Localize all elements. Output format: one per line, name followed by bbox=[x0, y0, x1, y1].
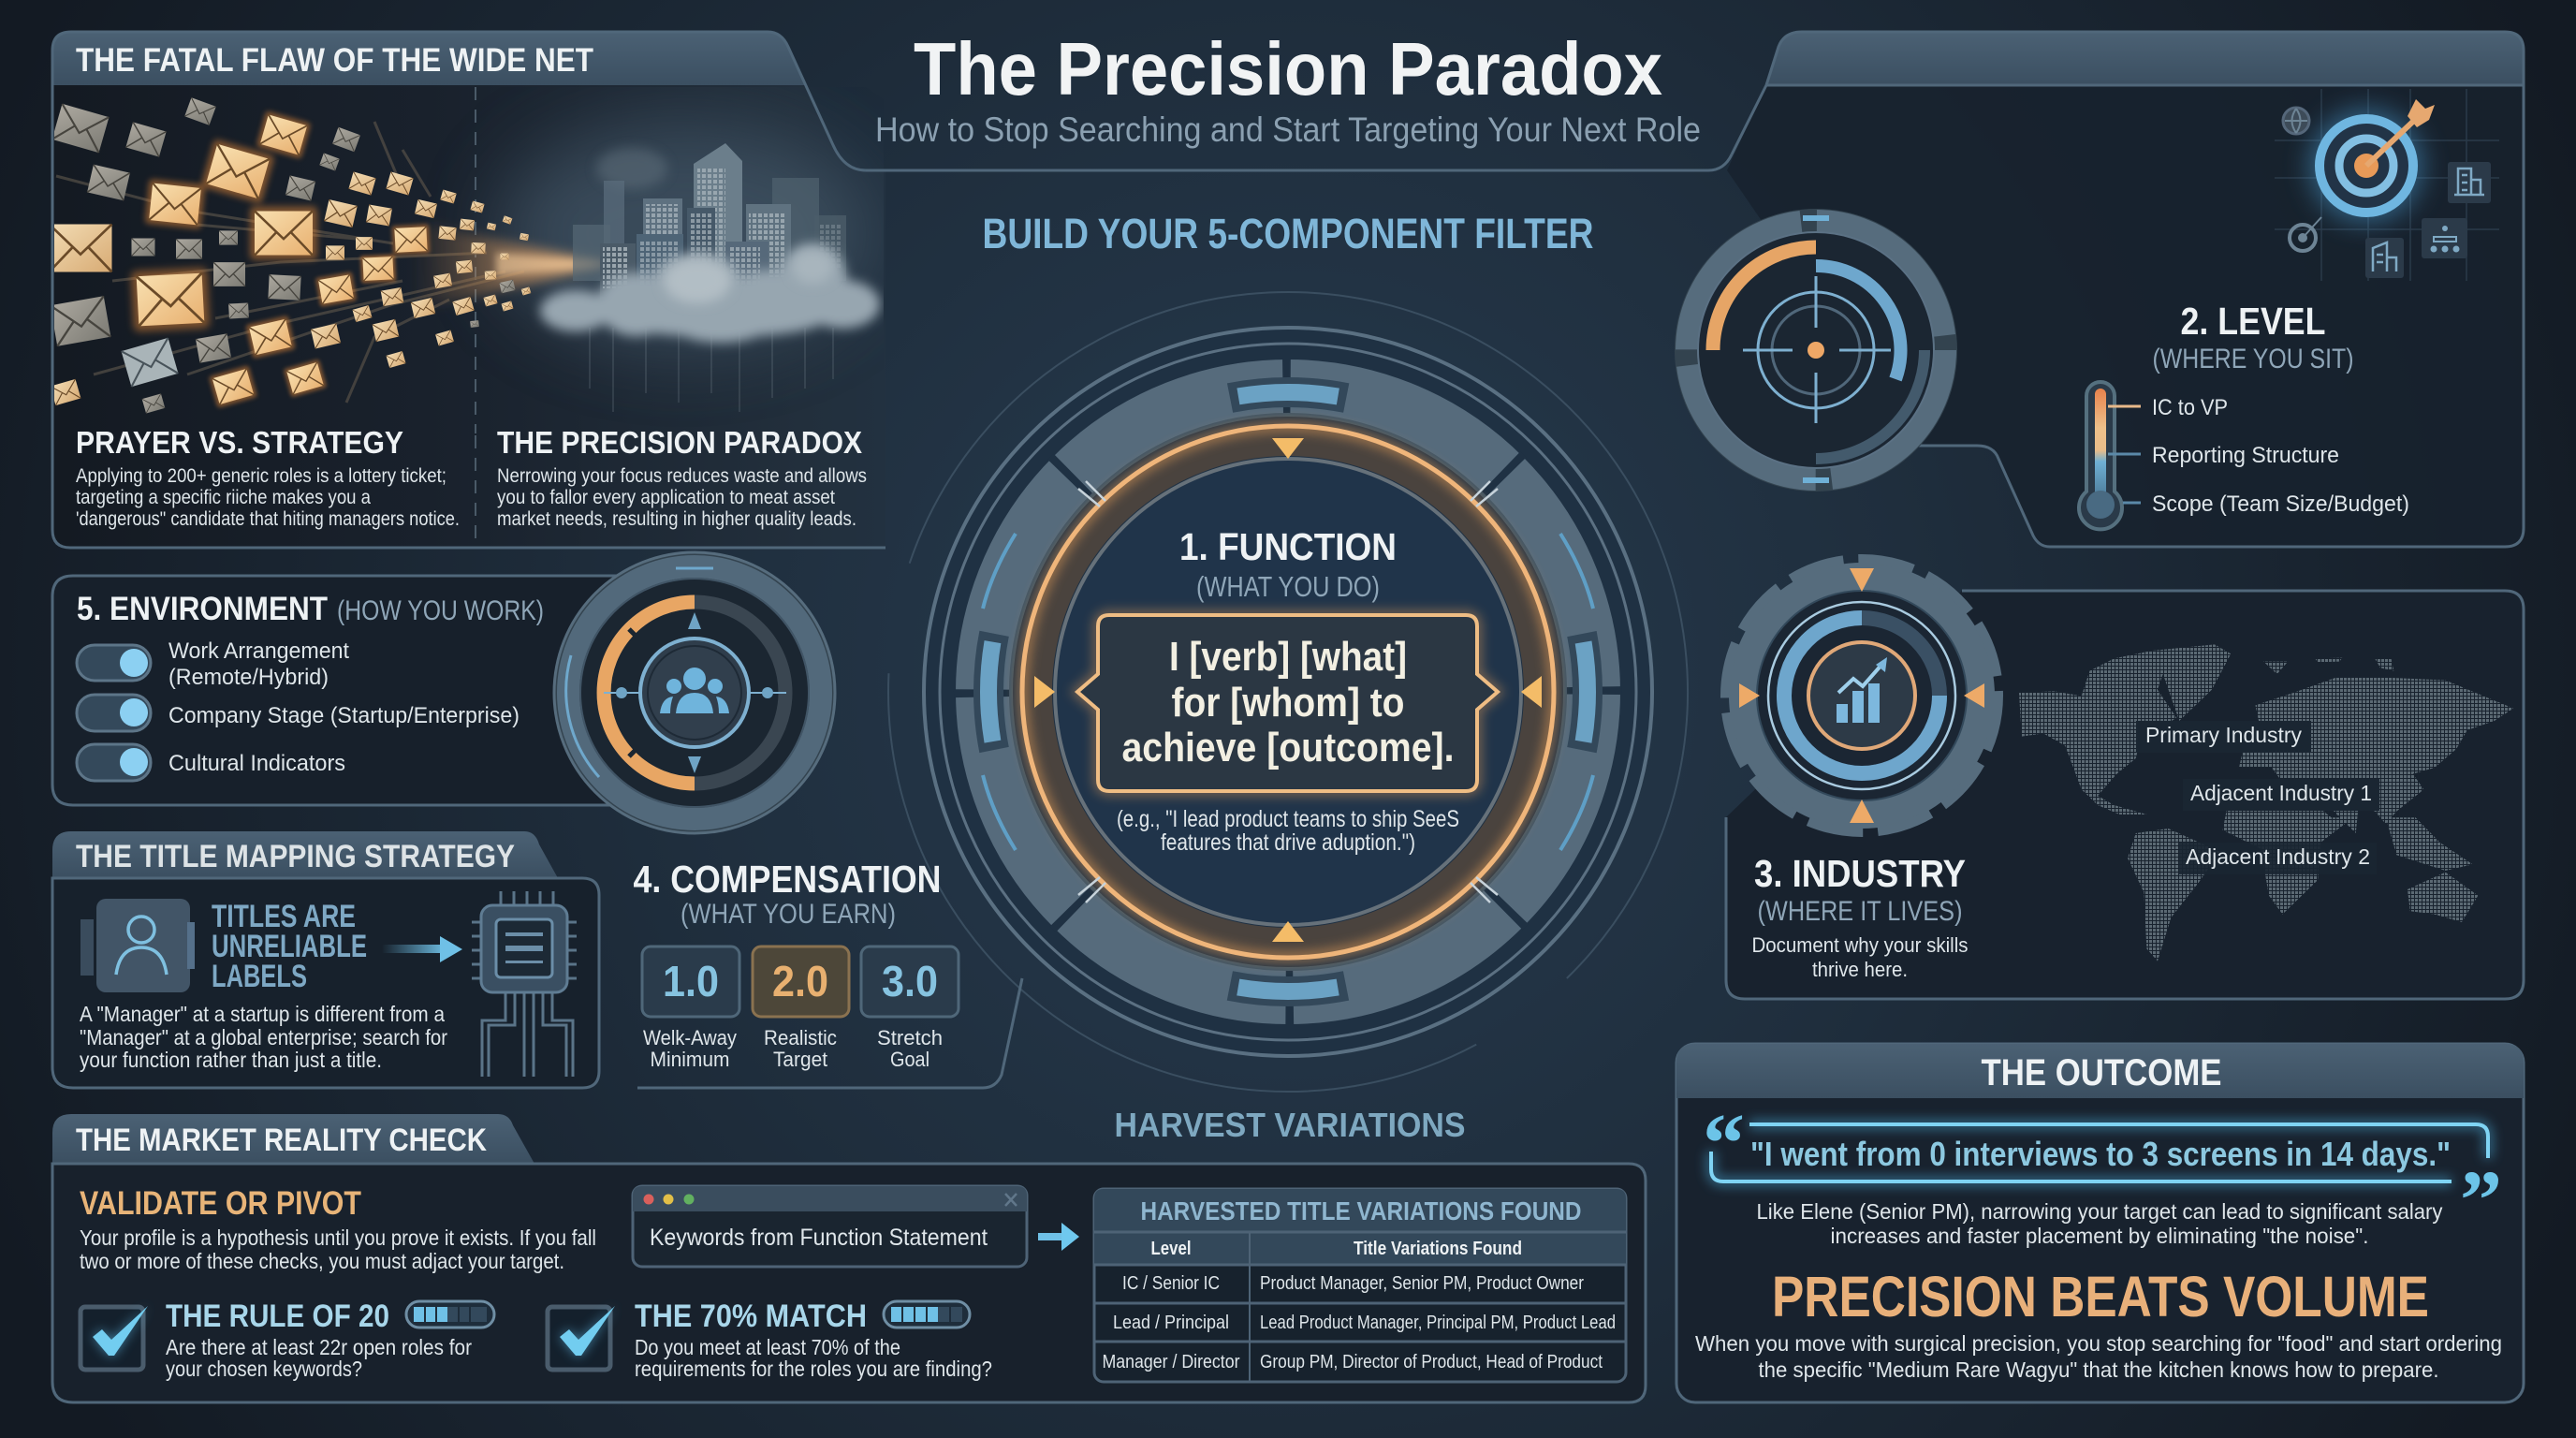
example sentence: (e.g., "I lead product teams to ship SeeS bbox=[1117, 806, 1459, 832]
check: the rule of 20: THE RULE OF 20 bbox=[166, 1299, 389, 1334]
panel: the market reality check bbox=[52, 1114, 1646, 1402]
text block: surgical precision bbox=[1695, 1331, 2502, 1382]
arrow: title to function bbox=[382, 936, 462, 962]
text block: like elene: increases and faster placement by eliminating "the noise". bbox=[1831, 1224, 2368, 1248]
panel: the fatal flaw of the wide net bbox=[49, 32, 886, 548]
panel: 2. level bbox=[1675, 32, 2524, 547]
card: realistic target: Realistic bbox=[764, 1026, 837, 1049]
heading: 2. level: 2. LEVEL bbox=[2181, 300, 2325, 343]
check: the 70% match: requirements for the roles you are finding? bbox=[635, 1357, 992, 1381]
toggle: work arrangement: (Remote/Hybrid) bbox=[168, 665, 329, 690]
header: the outcome: THE OUTCOME bbox=[1981, 1052, 2222, 1093]
map label: adjacent industry 2: Adjacent Industry 2 bbox=[2186, 844, 2370, 869]
card: realistic target: Target bbox=[773, 1048, 827, 1071]
callout: titles are unreliable labels bbox=[212, 899, 367, 994]
table: harvested title variations bbox=[1094, 1189, 1626, 1382]
text block: the precision paradox bbox=[497, 425, 867, 530]
storm cloud bbox=[540, 243, 880, 412]
icon: chip with traces bbox=[472, 891, 577, 1077]
panel: the title mapping strategy bbox=[52, 831, 599, 1088]
text block: prayer vs. strategy: 'dangerous" candidate that hiting managers notice. bbox=[76, 508, 460, 530]
text block: the precision paradox: you to fallor every application to meat asset bbox=[497, 487, 835, 508]
level list: Reporting Structure bbox=[2152, 443, 2339, 468]
text block: like elene: Like Elene (Senior PM), narrowing your target can lead to significant salary bbox=[1756, 1199, 2443, 1224]
testimonial quote: ” bbox=[2460, 1154, 2502, 1247]
illustration: envelopes streaming to a clouded city bbox=[49, 87, 880, 435]
header: title mapping: THE TITLE MAPPING STRATEGY bbox=[76, 839, 515, 874]
level list bbox=[2152, 395, 2409, 517]
section: 4. compensation bbox=[633, 858, 1022, 1088]
icon cluster: target and arrow bbox=[2275, 89, 2499, 281]
table: harvested title variations: IC / Senior IC bbox=[1122, 1273, 1220, 1294]
subtitle: How to Stop Searching and Start Targeting Your Next Role bbox=[875, 110, 1701, 149]
text block: validate or pivot: two or more of these checks, you must adjact your target. bbox=[80, 1249, 564, 1273]
text block: prayer vs. strategy bbox=[76, 425, 460, 530]
check: the rule of 20 bbox=[80, 1299, 494, 1381]
thermometer icon bbox=[2079, 382, 2141, 529]
subheading: where it lives: (WHERE IT LIVES) bbox=[1758, 896, 1962, 927]
header: fatal flaw: THE FATAL FLAW OF THE WIDE NET bbox=[76, 42, 593, 79]
toggle: work arrangement bbox=[77, 638, 349, 690]
card: stretch goal: Goal bbox=[890, 1048, 929, 1071]
table: harvested title variations: Title Variations Found bbox=[1354, 1239, 1522, 1259]
card: stretch goal bbox=[861, 946, 959, 1071]
heading: 4. compensation: 4. COMPENSATION bbox=[633, 858, 942, 901]
city skyline bbox=[573, 143, 846, 300]
icon: person card bbox=[80, 899, 195, 992]
card: stretch goal: 3.0 bbox=[882, 957, 938, 1005]
card: realistic target bbox=[753, 946, 849, 1071]
formula box: I [verb] [what] bbox=[1169, 634, 1407, 680]
text block: document why: Document why your skills bbox=[1752, 933, 1968, 957]
section heading: harvest variations: HARVEST VARIATIONS bbox=[1114, 1106, 1466, 1144]
card: realistic target: 2.0 bbox=[772, 957, 828, 1005]
text block: the precision paradox: market needs, resulting in higher quality leads. bbox=[497, 508, 856, 530]
card: walk-away minimum: Welk-Away bbox=[643, 1026, 737, 1049]
subheading: how you work: (HOW YOU WORK) bbox=[337, 595, 544, 626]
table: harvested title variations: Lead / Principal bbox=[1113, 1313, 1229, 1333]
panel: the outcome bbox=[1676, 1044, 2524, 1402]
map label: adjacent industry 1: Adjacent Industry 1 bbox=[2190, 781, 2372, 805]
browser window: keywords bbox=[633, 1186, 1027, 1267]
text block: validate or pivot: Your profile is a hypothesis until you prove it exists. If you fall bbox=[80, 1225, 596, 1250]
heading: 5. environment: 5. ENVIRONMENT bbox=[77, 591, 328, 627]
check: the 70% match: Do you meet at least 70% of the bbox=[635, 1335, 900, 1359]
icon: growth chart bbox=[1837, 657, 1887, 723]
testimonial quote: “ bbox=[1703, 1097, 1745, 1190]
testimonial quote bbox=[1703, 1097, 2502, 1247]
icon: people bbox=[660, 668, 729, 713]
text block: manager comparison: A "Manager" at a startup is different from a bbox=[80, 1002, 445, 1026]
level gauge bbox=[1675, 209, 1957, 492]
subheading: what you do: (WHAT YOU DO) bbox=[1196, 570, 1380, 603]
table: harvested title variations: Manager / Director bbox=[1103, 1352, 1240, 1372]
check: the 70% match: THE 70% MATCH bbox=[635, 1299, 867, 1334]
text block: prayer vs. strategy: PRAYER VS. STRATEGY bbox=[76, 425, 403, 460]
industry gauge bbox=[1725, 559, 1998, 832]
table: harvested title variations: Lead Product Manager, Principal PM, Product Lead bbox=[1260, 1313, 1616, 1333]
panel: 5. environment bbox=[52, 576, 618, 805]
text block: manager comparison bbox=[80, 1002, 447, 1072]
formula box: achieve [outcome]. bbox=[1121, 725, 1455, 770]
browser window: keywords: Keywords from Function Statement bbox=[650, 1225, 988, 1251]
map label: primary industry bbox=[2136, 721, 2311, 753]
example sentence bbox=[1117, 806, 1459, 856]
heading: 1. function: 1. FUNCTION bbox=[1179, 525, 1397, 568]
level list: IC to VP bbox=[2152, 395, 2228, 420]
testimonial quote: "I went from 0 interviews to 3 screens in 14 days." bbox=[1750, 1135, 2451, 1173]
text block: document why: thrive here. bbox=[1812, 958, 1908, 981]
text block: prayer vs. strategy: targeting a specific riiche makes you a bbox=[76, 487, 371, 508]
environment gauge bbox=[554, 552, 835, 833]
toggle: company stage: Company Stage (Startup/Enterprise) bbox=[168, 703, 520, 728]
table: harvested title variations: Level bbox=[1151, 1239, 1191, 1259]
text block: the precision paradox: Nerrowing your focus reduces waste and allows bbox=[497, 465, 867, 487]
text block: the precision paradox: THE PRECISION PARADOX bbox=[497, 425, 862, 460]
text block: validate or pivot bbox=[80, 1185, 596, 1273]
example sentence: features that drive aduption.") bbox=[1161, 829, 1415, 856]
blue tabs on the dial band bbox=[988, 392, 1588, 991]
panel: 3. industry bbox=[1726, 591, 2524, 999]
table: harvested title variations: Product Manager, Senior PM, Product Owner bbox=[1260, 1273, 1584, 1294]
callout: titles are unreliable labels: LABELS bbox=[212, 959, 307, 994]
title block bbox=[866, 27, 1732, 170]
level list: Scope (Team Size/Budget) bbox=[2152, 492, 2409, 517]
text block: document why bbox=[1752, 933, 1968, 981]
text block: surgical precision: the specific "Medium Rare Wagyu" that the kitchen knows how to prepare. bbox=[1758, 1357, 2439, 1382]
header: market reality check: THE MARKET REALITY CHECK bbox=[76, 1123, 487, 1158]
toggle: cultural indicators bbox=[77, 744, 345, 781]
orange ring bbox=[1038, 442, 1538, 942]
text block: like elene bbox=[1756, 1199, 2443, 1248]
text block: manager comparison: your function rather than just a title. bbox=[80, 1048, 382, 1072]
map label: primary industry: Primary Industry bbox=[2145, 723, 2302, 747]
subheading: what you earn: (WHAT YOU EARN) bbox=[681, 899, 896, 930]
callout: titles are unreliable labels: TITLES ARE bbox=[212, 899, 356, 934]
heading: 3. industry: 3. INDUSTRY bbox=[1754, 852, 1966, 895]
callout: titles are unreliable labels: UNRELIABLE bbox=[212, 929, 367, 964]
toggle: cultural indicators: Cultural Indicators bbox=[168, 751, 345, 776]
headline: precision beats volume: PRECISION BEATS VOLUME bbox=[1772, 1265, 2429, 1328]
toggle: work arrangement: Work Arrangement bbox=[168, 638, 349, 664]
central function dial bbox=[798, 202, 1778, 1181]
text block: validate or pivot: VALIDATE OR PIVOT bbox=[80, 1185, 361, 1222]
orange triangle markers bbox=[1034, 438, 1542, 942]
check: the rule of 20: Are there at least 22r open roles for bbox=[166, 1335, 472, 1359]
section heading: build your 5-component filter: BUILD YOUR 5-COMPONENT FILTER bbox=[983, 210, 1593, 257]
divider below illustration bbox=[475, 435, 476, 538]
card: walk-away minimum: Minimum bbox=[650, 1048, 730, 1071]
check: the rule of 20: your chosen keywords? bbox=[166, 1357, 362, 1381]
text block: surgical precision: When you move with surgical precision, you stop searching for "food" and start ordering bbox=[1695, 1331, 2502, 1356]
dotted world map bbox=[2012, 637, 2518, 966]
check: the 70% match bbox=[548, 1299, 992, 1381]
toggle: company stage bbox=[77, 695, 520, 731]
main title: The Precision Paradox bbox=[914, 27, 1662, 110]
table: harvested title variations: HARVESTED TITLE VARIATIONS FOUND bbox=[1140, 1196, 1582, 1225]
table: harvested title variations: Group PM, Director of Product, Head of Product bbox=[1260, 1352, 1603, 1372]
arrow: keywords to table bbox=[1038, 1223, 1079, 1251]
formula box bbox=[1077, 615, 1498, 791]
card: walk-away minimum bbox=[642, 946, 739, 1071]
formula box: for [whom] to bbox=[1172, 680, 1404, 726]
subheading: where you sit: (WHERE YOU SIT) bbox=[2153, 344, 2353, 374]
text block: prayer vs. strategy: Applying to 200+ generic roles is a lottery ticket; bbox=[76, 465, 446, 487]
card: walk-away minimum: 1.0 bbox=[663, 957, 719, 1005]
text block: manager comparison: "Manager" at a global enterprise; search for bbox=[80, 1025, 447, 1049]
card: stretch goal: Stretch bbox=[877, 1026, 943, 1049]
